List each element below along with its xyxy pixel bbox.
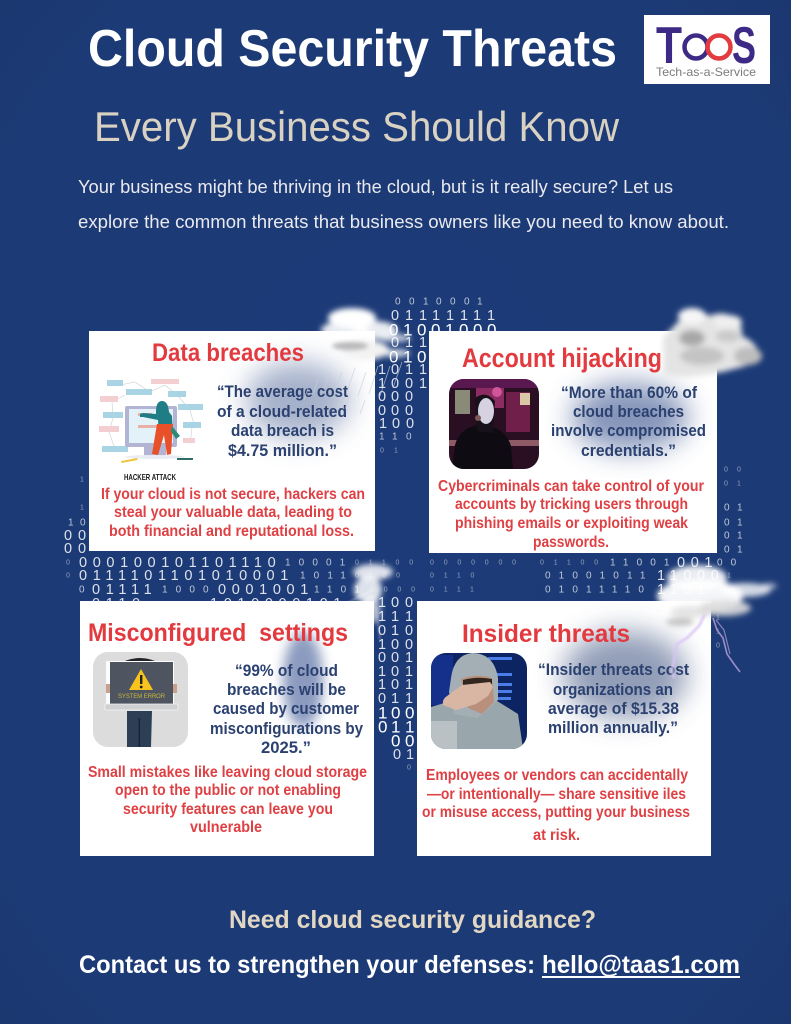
logo: [644, 15, 770, 84]
quote: insider cost: organizations an: [553, 680, 673, 699]
binary digit matrix background: 0110: [92, 596, 146, 612]
icon: lightning storm cloud right: [657, 565, 777, 678]
heading: account hijacking: Account hijacking: [462, 343, 662, 373]
binary digit matrix background: 100: [379, 416, 420, 432]
panel: misconfigured settings: [80, 601, 374, 856]
binary digit matrix background: 11000: [657, 568, 724, 584]
title: Cloud Security Threats: [88, 20, 617, 78]
binary digit matrix background: 0: [79, 584, 93, 596]
binary digit matrix background: 0: [716, 642, 730, 650]
description: insider threats: —or intentionally— share sensitive iles: [427, 786, 686, 803]
description: misconfigured settings: [88, 764, 367, 836]
binary digit matrix background: 000: [378, 403, 419, 419]
quote: average cost: data breach is: [231, 421, 334, 440]
binary digit matrix background: 010: [389, 348, 431, 366]
binary digit matrix background: 1101: [657, 582, 711, 598]
binary digit matrix background: 0111: [430, 586, 484, 594]
binary digit matrix background: 01: [724, 518, 751, 528]
binary digit matrix background: 1001: [378, 376, 433, 392]
binary digit matrix background: 101: [378, 664, 419, 680]
icon: hacker attack illustration: [99, 379, 203, 463]
binary digit matrix background: 10: [68, 518, 94, 528]
photo: masked hacker: [449, 379, 539, 469]
logo: T: [656, 17, 682, 75]
quote: insider cost: [538, 660, 689, 737]
quote: insider cost: average of $15.38: [548, 699, 679, 718]
quote: compromised credentials: credentials.”: [581, 441, 676, 460]
binary digit matrix background: 0010001: [395, 296, 491, 308]
description: account hijacking: phishing emails or exploiting weak: [455, 515, 688, 532]
panel: account hijacking: [429, 331, 717, 553]
binary digit matrix background: 01: [380, 448, 408, 454]
binary digit matrix background: 01111111: [391, 308, 501, 324]
quote: insider cost: million annually.”: [548, 718, 678, 737]
quote: compromised credentials: cloud breaches: [573, 402, 684, 421]
binary digit matrix background: 01111: [92, 582, 157, 598]
heading: misconfigured settings: Misconfigured settings: [88, 619, 348, 647]
binary digit matrix background: 1: [716, 614, 730, 622]
binary digit matrix background: 100: [378, 595, 419, 611]
logo: Tech-as-a-Service: [656, 65, 756, 79]
description: account hijacking: accounts by tricking users through: [455, 496, 688, 513]
binary digit matrix background: 011: [391, 335, 433, 351]
quote: customer misconfigurations: misconfigurations by: [210, 719, 363, 738]
binary digit matrix background: 101: [378, 677, 419, 693]
binary digit matrix background: 0110: [430, 572, 484, 580]
intro text: [78, 176, 729, 232]
binary digit matrix background: [64, 296, 751, 772]
description: insider threats: or misuse access, putting your business: [422, 804, 690, 821]
binary digit matrix background: 111: [378, 609, 419, 625]
binary digit matrix background: 100: [378, 637, 419, 653]
binary digit matrix background: 11001: [610, 558, 678, 568]
binary digit matrix background: 00: [64, 541, 92, 557]
binary digit matrix background: 1000: [162, 584, 217, 596]
subtitle: Every Business Should Know: [94, 103, 620, 150]
description: misconfigured settings: open to the public or not enabling: [115, 782, 341, 799]
icon: white burst cloud centre: [342, 564, 393, 641]
quote: compromised credentials: “More than 60% of: [561, 383, 697, 402]
description: account hijacking: Cybercriminals can take control of your: [438, 478, 704, 495]
binary digit matrix background: 001: [378, 650, 419, 666]
quote: customer misconfigurations: “99% of cloud: [235, 661, 338, 680]
description: account hijacking: passwords.: [533, 534, 609, 551]
quote: average cost: “The average cost: [217, 382, 348, 401]
binary digit matrix background: 01: [393, 747, 420, 763]
footer contact line: hello@taas1.com: [542, 951, 740, 979]
binary digit matrix background: 1: [716, 628, 730, 636]
quote: average cost: [217, 382, 348, 460]
binary digit matrix background: 010: [378, 623, 419, 639]
quote: average cost: of a cloud-related: [217, 402, 347, 421]
description: insider threats: at risk.: [533, 827, 580, 844]
footer contact line: Contact us to strengthen your defenses:: [79, 951, 535, 979]
binary digit matrix background: 0: [66, 572, 80, 580]
label: hacker attack: HACKER ATTACK: [124, 472, 177, 482]
footer heading: Need cloud security guidance?: [229, 906, 596, 934]
quote: customer misconfigurations: 2025.”: [261, 738, 311, 757]
intro text: Your business might be thriving in the cloud, but is it really secure? Let us: [78, 176, 673, 197]
panel: insider threats: [417, 601, 711, 856]
binary digit matrix background: 01011110: [545, 584, 652, 596]
description: data breaches: steal your valuable data, leading to: [114, 504, 352, 521]
binary digit matrix background: 1011: [300, 570, 354, 582]
binary digit matrix background: 000: [378, 389, 419, 405]
binary digit matrix background: 110: [379, 432, 420, 442]
binary digit matrix background: 01: [724, 544, 751, 556]
binary digit matrix background: 01001000: [389, 320, 501, 340]
binary digit matrix background: 1: [727, 572, 741, 580]
binary digit matrix background: 01: [724, 530, 751, 542]
binary digit matrix background: 0000: [370, 586, 425, 594]
binary digit matrix background: 000100101101110: [79, 555, 281, 571]
binary digit matrix background: 00: [391, 732, 419, 750]
quote: compromised credentials: [551, 383, 706, 460]
binary digit matrix background: 10001: [285, 558, 353, 568]
photo: hooded insider: [431, 653, 527, 749]
binary digit matrix background: 011: [378, 691, 419, 707]
quote: customer misconfigurations: caused by customer: [213, 699, 359, 718]
binary digit matrix background: 00: [717, 558, 744, 568]
binary digit matrix background: 00: [64, 528, 92, 544]
binary digit matrix background: 0: [66, 560, 80, 566]
icon: system error laptop: [93, 652, 188, 748]
binary digit matrix background: 0100: [355, 572, 410, 580]
description: data breaches: If your cloud is not secure, hackers can: [101, 486, 365, 503]
description: data breaches: both financial and reputational loss.: [109, 523, 354, 540]
description: data breaches: [101, 486, 365, 540]
binary digit matrix background: 00: [724, 466, 751, 474]
binary digit matrix background: 01: [724, 480, 751, 488]
quote: customer misconfigurations: [210, 661, 363, 757]
binary digit matrix background: 01001011: [545, 570, 654, 582]
binary digit matrix background: 1011: [378, 362, 433, 378]
binary digit matrix background: 1101: [314, 584, 368, 596]
heading: data breaches: Data breaches: [152, 339, 304, 367]
binary digit matrix background: 1: [80, 504, 94, 512]
binary digit matrix background: 01: [724, 502, 751, 514]
binary digit matrix background: 01100: [540, 560, 608, 566]
binary digit matrix background: 01: [716, 598, 743, 610]
description: misconfigured settings: vulnerable: [190, 819, 262, 836]
description: misconfigured settings: Small mistakes like leaving cloud storage: [88, 764, 367, 781]
quote: average cost: $4.75 million.”: [228, 441, 337, 460]
icon: white rain cloud top left: [304, 308, 411, 414]
description: account hijacking: [438, 478, 704, 551]
binary digit matrix background: 0111101101010001: [79, 568, 294, 584]
binary digit matrix background: 1: [80, 476, 94, 484]
intro text: explore the common threats that business owners like you need to know about.: [78, 211, 729, 232]
panel: data breaches: [89, 331, 375, 551]
icon: system error laptop: SYSTEM ERROR: [118, 694, 166, 700]
binary digit matrix background: 100: [378, 704, 419, 722]
quote: compromised credentials: involve compromised: [551, 421, 706, 440]
description: insider threats: [422, 767, 690, 844]
quote: customer misconfigurations: breaches will be: [227, 680, 346, 699]
quote: insider cost: “Insider threats cost: [538, 660, 689, 679]
binary digit matrix background: 01100: [355, 560, 423, 566]
heading: insider threats: Insider threats: [462, 620, 630, 648]
binary digit matrix background: 011: [378, 718, 419, 736]
binary digit matrix background: 001: [677, 555, 718, 571]
binary digit matrix background: 1010000101: [210, 596, 347, 612]
description: misconfigured settings: security features can leave you: [123, 801, 333, 818]
description: insider threats: Employees or vendors can accidentally: [426, 767, 688, 784]
binary digit matrix background: 0001001: [218, 582, 314, 598]
icon: grey storm cloud top right: [663, 308, 762, 377]
binary digit matrix background: 0000000: [430, 560, 526, 566]
logo: S: [732, 17, 756, 75]
binary digit matrix background: 0: [407, 764, 421, 772]
